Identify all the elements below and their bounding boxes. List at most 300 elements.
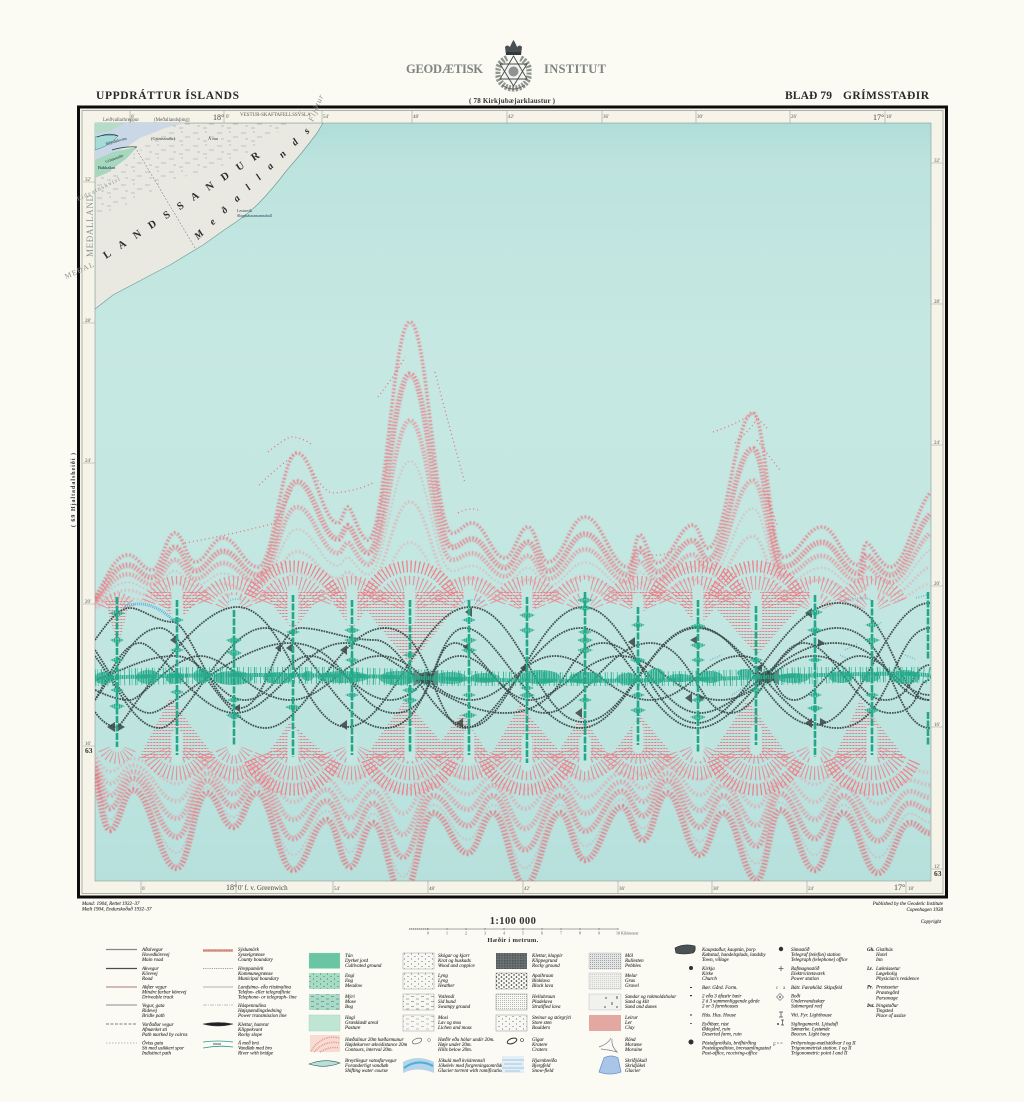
scale bar: 1 <box>446 930 448 936</box>
legend: craters: Craters <box>532 1048 547 1053</box>
legend: trigonometric point: s. o <box>777 1040 783 1045</box>
labels: grey place names crossing the frame <box>63 93 326 281</box>
margin: bottom graticule ticks and minutes: 17° <box>894 883 905 892</box>
legend: bog swatch: Bog <box>345 1005 354 1010</box>
header: neighbouring sheet label north: ( 78 Kirkjubæjarklaustur ) <box>469 97 556 105</box>
labels: small place names on land <box>98 136 273 218</box>
legend: power transmission line: Power transmission line <box>237 1014 287 1019</box>
legend: swampy ground swatch <box>403 994 471 1010</box>
margin: bottom graticule ticks and minutes: 18° <box>226 883 237 892</box>
legend: block lava swatch: Bloklava <box>532 979 550 984</box>
legend: physician abbreviation: Lægebolig <box>875 972 898 977</box>
legend: road: Road <box>141 977 153 982</box>
margin: top graticule ticks and minutes: 6' <box>131 115 134 120</box>
legend: driveable track: Driveable track <box>141 996 174 1000</box>
legend: moraine symbol: Moræne <box>624 1043 642 1048</box>
legend: bridle path <box>106 1004 165 1019</box>
scale: heights note: Hæðir í metrum. <box>487 937 539 944</box>
legend: gravel swatch <box>589 973 639 989</box>
legend: farmhouses symbol: 2 or 3 farmhouses <box>702 1004 738 1010</box>
legend: place of assize abbreviation: Þst. <box>866 1004 875 1009</box>
legend: river with bridge: River with bridge <box>237 1052 274 1056</box>
legend: moraine symbol <box>599 1038 643 1053</box>
labels: grey place names crossing the frame: MEÐALLAND <box>85 194 95 257</box>
margin: right latitude ticks: 12' <box>934 865 940 870</box>
legend: post-office symbol: Post-office, receiving-office <box>701 1052 758 1056</box>
legend: clay swatch <box>589 1015 638 1031</box>
legend: farm symbol: Bær. Gård. Farm. <box>702 985 738 991</box>
legend: ruin symbol: Eyðibær, rúst <box>701 1022 729 1028</box>
labels: grey place names crossing the frame: Eldvatnskvísl <box>76 177 121 203</box>
legend: county boundary: County boundary <box>238 958 274 963</box>
legend: sand and dunes swatch: Sand and dunes <box>625 1005 657 1010</box>
legend: trigonometric point <box>773 1040 856 1056</box>
legend: parsonage abbreviation: Pr. <box>867 986 873 990</box>
legend: indistinct path <box>106 1040 184 1056</box>
margin: left latitude ticks: 20' <box>85 600 91 605</box>
legend: beacon symbol: Siglingamerki. Ljósdufl <box>791 1022 839 1028</box>
legend: meadow swatch: Meadow <box>344 984 363 989</box>
scale bar: 9 <box>598 930 600 936</box>
legend: parsonage abbreviation <box>867 986 900 1002</box>
legend: rocky ground swatch <box>496 953 563 969</box>
legend: swampy ground swatch: Votlendi <box>438 995 455 1000</box>
legend: power transmission line <box>203 1004 287 1019</box>
margin: top graticule ticks and minutes: 0' <box>226 115 230 120</box>
legend: heather swatch: Lyng <box>437 974 448 979</box>
legend: snow-field <box>502 1056 557 1074</box>
margin: top graticule ticks and minutes: 18' <box>886 115 892 120</box>
scale bar: 7 <box>560 930 562 936</box>
margin: top graticule ticks and minutes: VESTUR-SKAFTAFELLSSÝSLA <box>240 112 311 118</box>
legend: physician abbreviation: Læknissetur <box>875 967 900 972</box>
legend: county boundary: Sysselgrænse <box>238 953 265 958</box>
legend: rocky slope: Rocky slope <box>237 1033 263 1038</box>
legend: bridle path: Ridevej <box>141 1009 158 1014</box>
legend: lighthouse symbol <box>779 1012 833 1018</box>
margin: top graticule ticks and minutes: 36' <box>603 115 609 120</box>
legend: snow-field: Bjergfeld <box>532 1064 551 1069</box>
legend: stratified lava swatch: Stratified lava <box>532 1005 561 1010</box>
header: institute name <box>406 62 607 76</box>
legend: boulders swatch: Boulders <box>532 1026 550 1031</box>
legend: pebbles swatch <box>589 953 644 969</box>
legend: hills below 20m: Hæðir eða hólar undir 20m. <box>437 1037 495 1043</box>
legend: lichen and moss swatch: Mosi <box>437 1016 449 1021</box>
legend: meadow swatch <box>309 973 363 989</box>
legend: place of assize abbreviation <box>866 1003 906 1019</box>
legend: path marked by cairns: Varðaður vegur <box>142 1022 174 1028</box>
legend: cultivated ground swatch: Cultivated ground <box>345 964 382 969</box>
legend: mountain points: a <box>783 986 786 991</box>
legend: hills below 20m: Hills below 20m. <box>437 1048 472 1053</box>
labels: small place names on land: Lestarvík <box>237 208 252 213</box>
legend: boulders swatch <box>496 1015 572 1031</box>
legend: ruin symbol: Ødegård, ruin <box>701 1026 731 1032</box>
legend: indistinct path: Óviss gata <box>142 1040 164 1046</box>
legend: mountain points: c <box>776 986 779 991</box>
margin: right latitude ticks: 16' <box>934 723 940 728</box>
legend: hotel abbreviation: Inn <box>875 958 883 963</box>
margin: bottom graticule ticks and minutes: 6' <box>142 887 146 892</box>
legend: path marked by cairns <box>106 1022 187 1038</box>
scale bar: 10 Kílómetrar <box>616 930 639 936</box>
legend: glacier symbol: Skridjökel <box>625 1064 646 1069</box>
legend: snow-field: Snow-field <box>532 1069 554 1074</box>
legend: stratified lava swatch <box>496 994 561 1010</box>
labels: grey place names crossing the frame: MEÐAL <box>63 260 96 281</box>
legend: wood and coppice swatch <box>403 953 476 969</box>
legend: power station symbol: Elektricitetsværk <box>790 972 826 977</box>
legend: telegraph symbol <box>779 947 848 963</box>
legend: place of assize abbreviation: Tingsted <box>876 1009 893 1014</box>
chart: blue snow marks <box>125 594 930 695</box>
legend: beacon symbol <box>777 1020 839 1038</box>
legend: parsonage abbreviation: Præstegård <box>875 990 900 996</box>
legend: stratified lava swatch: Helluhraun <box>531 995 556 1000</box>
margin: top graticule ticks and minutes: 54' <box>323 115 329 120</box>
margin: bottom graticule ticks and minutes: 48' <box>429 887 435 892</box>
margin: left latitude ticks: 28' <box>85 319 91 324</box>
chart: radial red fans at spike ends <box>104 566 915 790</box>
legend: physician abbreviation: Lr. <box>866 967 873 972</box>
icon: crown, wreath and star emblem <box>497 40 530 89</box>
legend: block lava swatch: Block lava <box>532 984 554 989</box>
margin: top graticule ticks and minutes: 30' <box>697 115 703 120</box>
legend: farmhouses symbol: 2 à 3 sammenliggende gårde <box>702 998 760 1004</box>
legend: clay swatch: Leirur <box>624 1016 638 1021</box>
legend: swampy ground swatch: Sid bund <box>438 1000 456 1005</box>
margin: left latitude ticks: 24' <box>85 459 91 464</box>
chart: lower red hachure contours <box>95 754 930 895</box>
legend: telephone line <box>203 984 297 1000</box>
header: sheet number and name: BLAÐ 79 <box>785 90 832 102</box>
legend: rocky ground swatch: Klettar, klappir <box>531 954 563 959</box>
chart: green central band <box>94 668 931 685</box>
legend: municipal boundary <box>203 967 280 982</box>
margin: right latitude ticks: 32' <box>934 159 940 164</box>
legend: mountain points: Bátr. Færøhöld. Skipsfeld <box>791 986 843 991</box>
legend: boulders swatch: Steinar og stórgrýti <box>532 1016 572 1021</box>
legend: main road: Hovedkörevej <box>141 953 170 958</box>
legend: driveable track: Akfær vegur <box>141 986 167 990</box>
legend: glacier symbol <box>599 1056 648 1074</box>
scale bar: 6 <box>541 930 543 936</box>
legend: ruin symbol <box>690 1022 742 1038</box>
legend: craters <box>506 1037 548 1053</box>
legend: house symbol: Hús. Hus. House <box>701 1014 737 1018</box>
legend: contours swatch <box>310 1035 408 1053</box>
note: publisher and copyright: Copyright <box>921 920 942 925</box>
legend: town symbol: Kaupstaður, kauptún, þorp <box>701 947 756 953</box>
margin: bottom graticule ticks and minutes: 18' <box>908 887 914 892</box>
legend: cultivated ground swatch: Tún <box>345 954 353 959</box>
legend: hotel abbreviation: Gistihús <box>876 948 893 953</box>
legend: bog swatch: Mose <box>344 1000 357 1005</box>
legend: river with bridge <box>203 1040 274 1056</box>
legend: farm symbol <box>690 985 738 991</box>
legend: rocky slope: Klettar, hamrar <box>237 1023 269 1028</box>
legend: block lava swatch: Apalhraun <box>531 974 554 979</box>
legend: glacier symbol: Glacier <box>625 1069 640 1074</box>
legend: glacier torrent swatch: Glacier torrent with ramifications <box>438 1069 506 1074</box>
legend: hotel abbreviation: Hotel <box>875 953 888 958</box>
labels: small place names on land: Bakkakot <box>98 165 116 170</box>
margin: top graticule ticks and minutes <box>103 111 892 123</box>
legend: church symbol: Kirke <box>701 972 714 977</box>
legend: indistinct path: Sti med usikkert spor <box>142 1046 184 1052</box>
legend: main road: Aðalvegur <box>141 947 163 953</box>
margin: right latitude ticks: 63 <box>934 869 942 878</box>
legend: bog swatch <box>309 994 357 1010</box>
legend: glacier torrent swatch: Jökelelv med forgreningsområde <box>438 1063 504 1069</box>
legend: power station symbol: Power station <box>790 977 819 982</box>
legend: place of assize abbreviation: Place of assize <box>875 1014 906 1019</box>
legend: shifting water course: Foranderligt vandløb <box>344 1064 389 1069</box>
labels: small place names on land: Slippbátaramannahall <box>237 213 273 218</box>
legend: glacier symbol: Skriðjökull <box>625 1058 648 1064</box>
margin: bottom graticule ticks and minutes: 54' <box>334 887 340 892</box>
legend: church symbol <box>689 966 717 982</box>
legend: telegraph symbol: Telegraph (telephone) office <box>791 958 848 963</box>
legend: trigonometric point: Trigonometric point I and II <box>791 1052 848 1056</box>
legend: stratified lava swatch: Pladelava <box>531 1000 553 1005</box>
legend: town symbol: Købstad, handelsplads, landsby <box>701 953 766 958</box>
header: institute name: INSTITUT <box>544 62 607 76</box>
legend: town symbol: Town, village <box>702 958 730 963</box>
scale bar: 8 <box>579 930 581 936</box>
label: Meðallands: Meðallands <box>192 126 312 243</box>
labels: small place names on land: (Grímsstaðir) <box>151 136 176 141</box>
margin: left latitude ticks <box>83 178 95 755</box>
legend: telegraph symbol: Símastöð <box>791 947 810 953</box>
margin: right latitude ticks: 28' <box>934 300 940 305</box>
legend: heather swatch: Heather <box>437 984 454 989</box>
legend: path marked by cairns: Afmærket sti <box>141 1028 168 1033</box>
legend: farmhouses symbol <box>690 994 760 1010</box>
legend: main road <box>106 947 170 963</box>
legend: trigonometric point: Trigonometrisk station. I og II <box>791 1046 852 1052</box>
legend: glacier torrent swatch: Jökulá með kvíslrennsli <box>438 1058 486 1064</box>
label: neighbouring sheet west: ( 69 Hjaltadalsheiði ) <box>70 453 77 527</box>
legend: sand and dunes swatch <box>589 994 676 1010</box>
legend: parsonage abbreviation: Parsonage <box>875 996 898 1002</box>
legend: wood and coppice swatch: Krat og buskads <box>437 959 471 964</box>
legend: snow-field: Hjarnbreiða <box>531 1058 557 1064</box>
margin: bottom graticule ticks and minutes: 30' <box>713 887 719 892</box>
legend: gravel swatch: Grus <box>625 979 635 984</box>
legend: municipal boundary: Municipal boundary <box>237 977 280 982</box>
legend: sand and dunes swatch: Sandar og rokmoldsholar <box>625 995 676 1000</box>
legend: pasture swatch: Græsklædt areal <box>345 1021 379 1026</box>
legend: beacon symbol: Beacon. Light buoy <box>791 1032 831 1038</box>
legend: road: Körevej <box>141 972 158 977</box>
margin: bottom graticule ticks and minutes: 42' <box>524 887 530 892</box>
margin: right latitude ticks: 24' <box>934 441 940 446</box>
legend: power transmission line: Højspændingsledning <box>237 1009 282 1014</box>
legend: church symbol: Church <box>702 977 717 982</box>
legend: road: Akvegur <box>141 967 159 972</box>
legend: bridle path: Vegur, gata <box>142 1004 165 1009</box>
legend: hills below 20m <box>411 1037 495 1053</box>
header: sheet number and name: GRÍMSSTAÐIR <box>843 88 930 102</box>
legend: shifting water course <box>309 1059 397 1074</box>
legend: shifting water course: Shifting water course <box>345 1069 389 1074</box>
legend: gravel swatch: Gravel <box>625 984 639 989</box>
legend: telephone line: Landsíma- eða ritsímalína <box>237 984 292 990</box>
legend: submerged reef symbol: Submerged reef <box>791 1004 823 1010</box>
land: Landssandur coast <box>95 123 323 309</box>
legend: boulders swatch: Store sten <box>532 1021 552 1026</box>
scale bar <box>409 928 639 936</box>
legend: lichen and moss swatch: Lichen and moss <box>437 1026 472 1031</box>
legend: block lava swatch <box>496 973 554 989</box>
chart: black interlacing wave lines <box>95 603 930 728</box>
chart: dotted outer contours above peaks <box>185 357 780 555</box>
margin: top graticule ticks and minutes: 42' <box>508 115 514 120</box>
legend: wood and coppice swatch: Wood and coppice <box>438 964 476 969</box>
legend: bog swatch: Mýri <box>344 995 355 1000</box>
legend: pebbles swatch: Möl <box>624 954 634 959</box>
header: sheet number and name <box>785 88 930 102</box>
legend: post-office symbol <box>688 1040 771 1056</box>
legend: moraine symbol: Rönd <box>624 1038 636 1043</box>
legend: rocky ground swatch: Rocky ground <box>531 964 560 969</box>
note: publisher and copyright: Copenhagen 1938 <box>906 908 943 913</box>
legend: path marked by cairns: Path marked by cairns <box>141 1033 187 1038</box>
margin: top graticule ticks and minutes: (Meðallandsþing) <box>154 117 190 123</box>
legend: pebbles swatch: Rullesten <box>624 959 644 964</box>
legend: post-office symbol: Postekspedition, brevsamlingssted <box>701 1046 771 1052</box>
labels: grey place names crossing the frame: Fljótur <box>306 93 326 124</box>
legend: meadow swatch: Engi <box>344 974 355 979</box>
scale bar: 5 <box>522 930 524 936</box>
legend: sand and dunes swatch: Sand og klit <box>625 1000 649 1005</box>
legend: wood and coppice swatch: Skógar og kjarr <box>438 954 470 959</box>
legend: place of assize abbreviation: Þingstaður <box>875 1003 898 1009</box>
legend: lichen and moss swatch: Lav og mos <box>437 1021 461 1026</box>
legend: beacon symbol: Sømærke. Lystønde <box>791 1028 831 1032</box>
note: publisher and copyright: Published by the Geodetic Institute <box>872 902 944 907</box>
legend: clay swatch: Clay <box>625 1026 635 1031</box>
legend: submerged reef symbol: Undervandsskær <box>791 1000 825 1004</box>
legend: indistinct path: Indistinct path <box>141 1052 172 1056</box>
legend: county boundary: Sýslumörk <box>238 948 260 953</box>
sea clearings around the spike ends <box>177 585 872 766</box>
map frame <box>78 107 946 897</box>
legend: contours swatch: Hæðalínur 20m hæðarmunur <box>344 1037 404 1043</box>
margin: bottom graticule ticks and minutes <box>141 881 914 893</box>
legend: driveable track <box>106 986 187 1000</box>
legend: physician abbreviation <box>866 967 920 982</box>
labels: small place names on land: Á ma <box>208 136 218 141</box>
legend: trigonometric point: F <box>773 1042 776 1048</box>
chart: green vertical spikes <box>109 592 928 763</box>
margin: bottom graticule ticks and minutes: 24' <box>808 887 814 892</box>
legend: contours swatch: Contours, interval 20m. <box>345 1048 393 1053</box>
labels: small place names on land: Slýjadalsvatn <box>105 136 127 146</box>
header: sheet series title: UPPDRÁTTUR ÍSLANDS <box>96 88 239 102</box>
legend: rocky slope <box>203 1022 269 1038</box>
margin: top graticule ticks and minutes: 48' <box>413 115 419 120</box>
margin: top graticule ticks and minutes: 18° <box>213 113 224 122</box>
legend: municipal boundary: Kommunegrænse <box>237 972 274 977</box>
legend: road <box>106 967 159 982</box>
scale bar: 2 <box>465 930 467 936</box>
legend: submerged reef symbol: Boði <box>791 994 801 1000</box>
legend: river with bridge: Á með brú <box>237 1040 259 1046</box>
legend: craters: Kratere <box>531 1043 548 1048</box>
legend: gravel swatch: Melar <box>624 974 637 979</box>
legend: pasture swatch <box>309 1015 379 1031</box>
note: survey dates: Mand: 1904, Rettet 1932–37 <box>81 902 140 907</box>
margin: left latitude ticks: 63 <box>85 746 93 755</box>
scale bar: 4 <box>503 930 505 936</box>
legend: moraine symbol: Moraine <box>624 1048 643 1053</box>
legend: submerged reef symbol <box>776 994 825 1010</box>
legend: rocky slope: Klippekvant <box>237 1028 263 1033</box>
legend: craters: Gígar <box>532 1038 544 1043</box>
map artwork <box>94 123 931 895</box>
margin: bottom graticule ticks and minutes: 36' <box>619 887 625 892</box>
legend: river with bridge: Vandløb med bro <box>238 1046 272 1052</box>
legend: telephone line: Telephone- or telegraph- line <box>238 996 297 1000</box>
legend: bridle path: Bridle path <box>142 1014 165 1019</box>
legend: trigonometric point: Þríhyrninga-mælistöðvar I og II <box>790 1040 856 1046</box>
margin: top graticule ticks and minutes: Leiðvallarhreppur <box>103 117 139 123</box>
margin: right latitude ticks: 20' <box>934 582 940 587</box>
legend: lighthouse symbol: Viti. Fyr. Lighthouse <box>791 1014 833 1018</box>
legend: heather swatch <box>403 973 454 989</box>
legend: glacier torrent swatch <box>403 1058 506 1074</box>
legend: contours swatch: Højdekurver ækvidistance 20m <box>344 1043 408 1048</box>
note: survey dates <box>81 902 152 912</box>
chart: dark wedge marks and nodes <box>107 607 827 732</box>
margin: right latitude ticks <box>931 159 943 878</box>
legend: heather swatch: Lyng <box>437 979 448 984</box>
margin: bottom graticule ticks and minutes: 0' f. v. Greenwich <box>238 884 288 892</box>
margin: top graticule ticks and minutes: 26' <box>791 115 797 120</box>
legend: physician abbreviation: Physician's residence <box>875 977 920 982</box>
legend: cultivated ground swatch: Dyrket jord <box>344 959 369 964</box>
scale: ratio: 1:100 000 <box>490 916 536 927</box>
margin: left latitude ticks: 16' <box>85 742 91 747</box>
legend: parsonage abbreviation: Prestssetur <box>875 986 898 990</box>
legend: hotel abbreviation <box>867 948 893 963</box>
legend: driveable track: Mindre farbar körevej <box>141 990 187 996</box>
legend: swampy ground swatch: Swampy ground <box>438 1005 471 1010</box>
note: survey dates: Mælt 1904, Endurskoðað 1932–37 <box>81 906 152 912</box>
legend: pasture swatch: Pasture <box>344 1026 361 1031</box>
legend: municipal boundary: Hreppamörk <box>237 967 264 972</box>
legend: lichen and moss swatch <box>403 1015 472 1031</box>
scale bar: 0 <box>427 930 429 936</box>
legend: post-office symbol: Póstafgreiðsla, bréfhirðing <box>701 1040 757 1046</box>
chart: upper red hachure contours <box>95 322 930 609</box>
margin: top graticule ticks and minutes: 17° <box>873 113 884 122</box>
legend: hotel abbreviation: Gh. <box>867 948 875 953</box>
legend: farmhouses symbol: 2 eða 3 áfastir bæir <box>702 994 742 1000</box>
note: publisher and copyright <box>872 902 944 925</box>
legend: pasture swatch: Hagi <box>344 1016 356 1021</box>
labels: small place names on land: Grímsstaðir <box>105 153 125 164</box>
legend: town symbol <box>675 945 766 963</box>
legend: hills below 20m: Høje under 20m. <box>437 1043 472 1048</box>
legend: power transmission line: Háspennulína <box>237 1004 267 1009</box>
legend: ruin symbol: Deserted farm, ruin <box>701 1032 742 1038</box>
legend: power station symbol <box>778 966 826 982</box>
legend: telephone line: Telefon- eller telegraflinie <box>238 990 291 996</box>
